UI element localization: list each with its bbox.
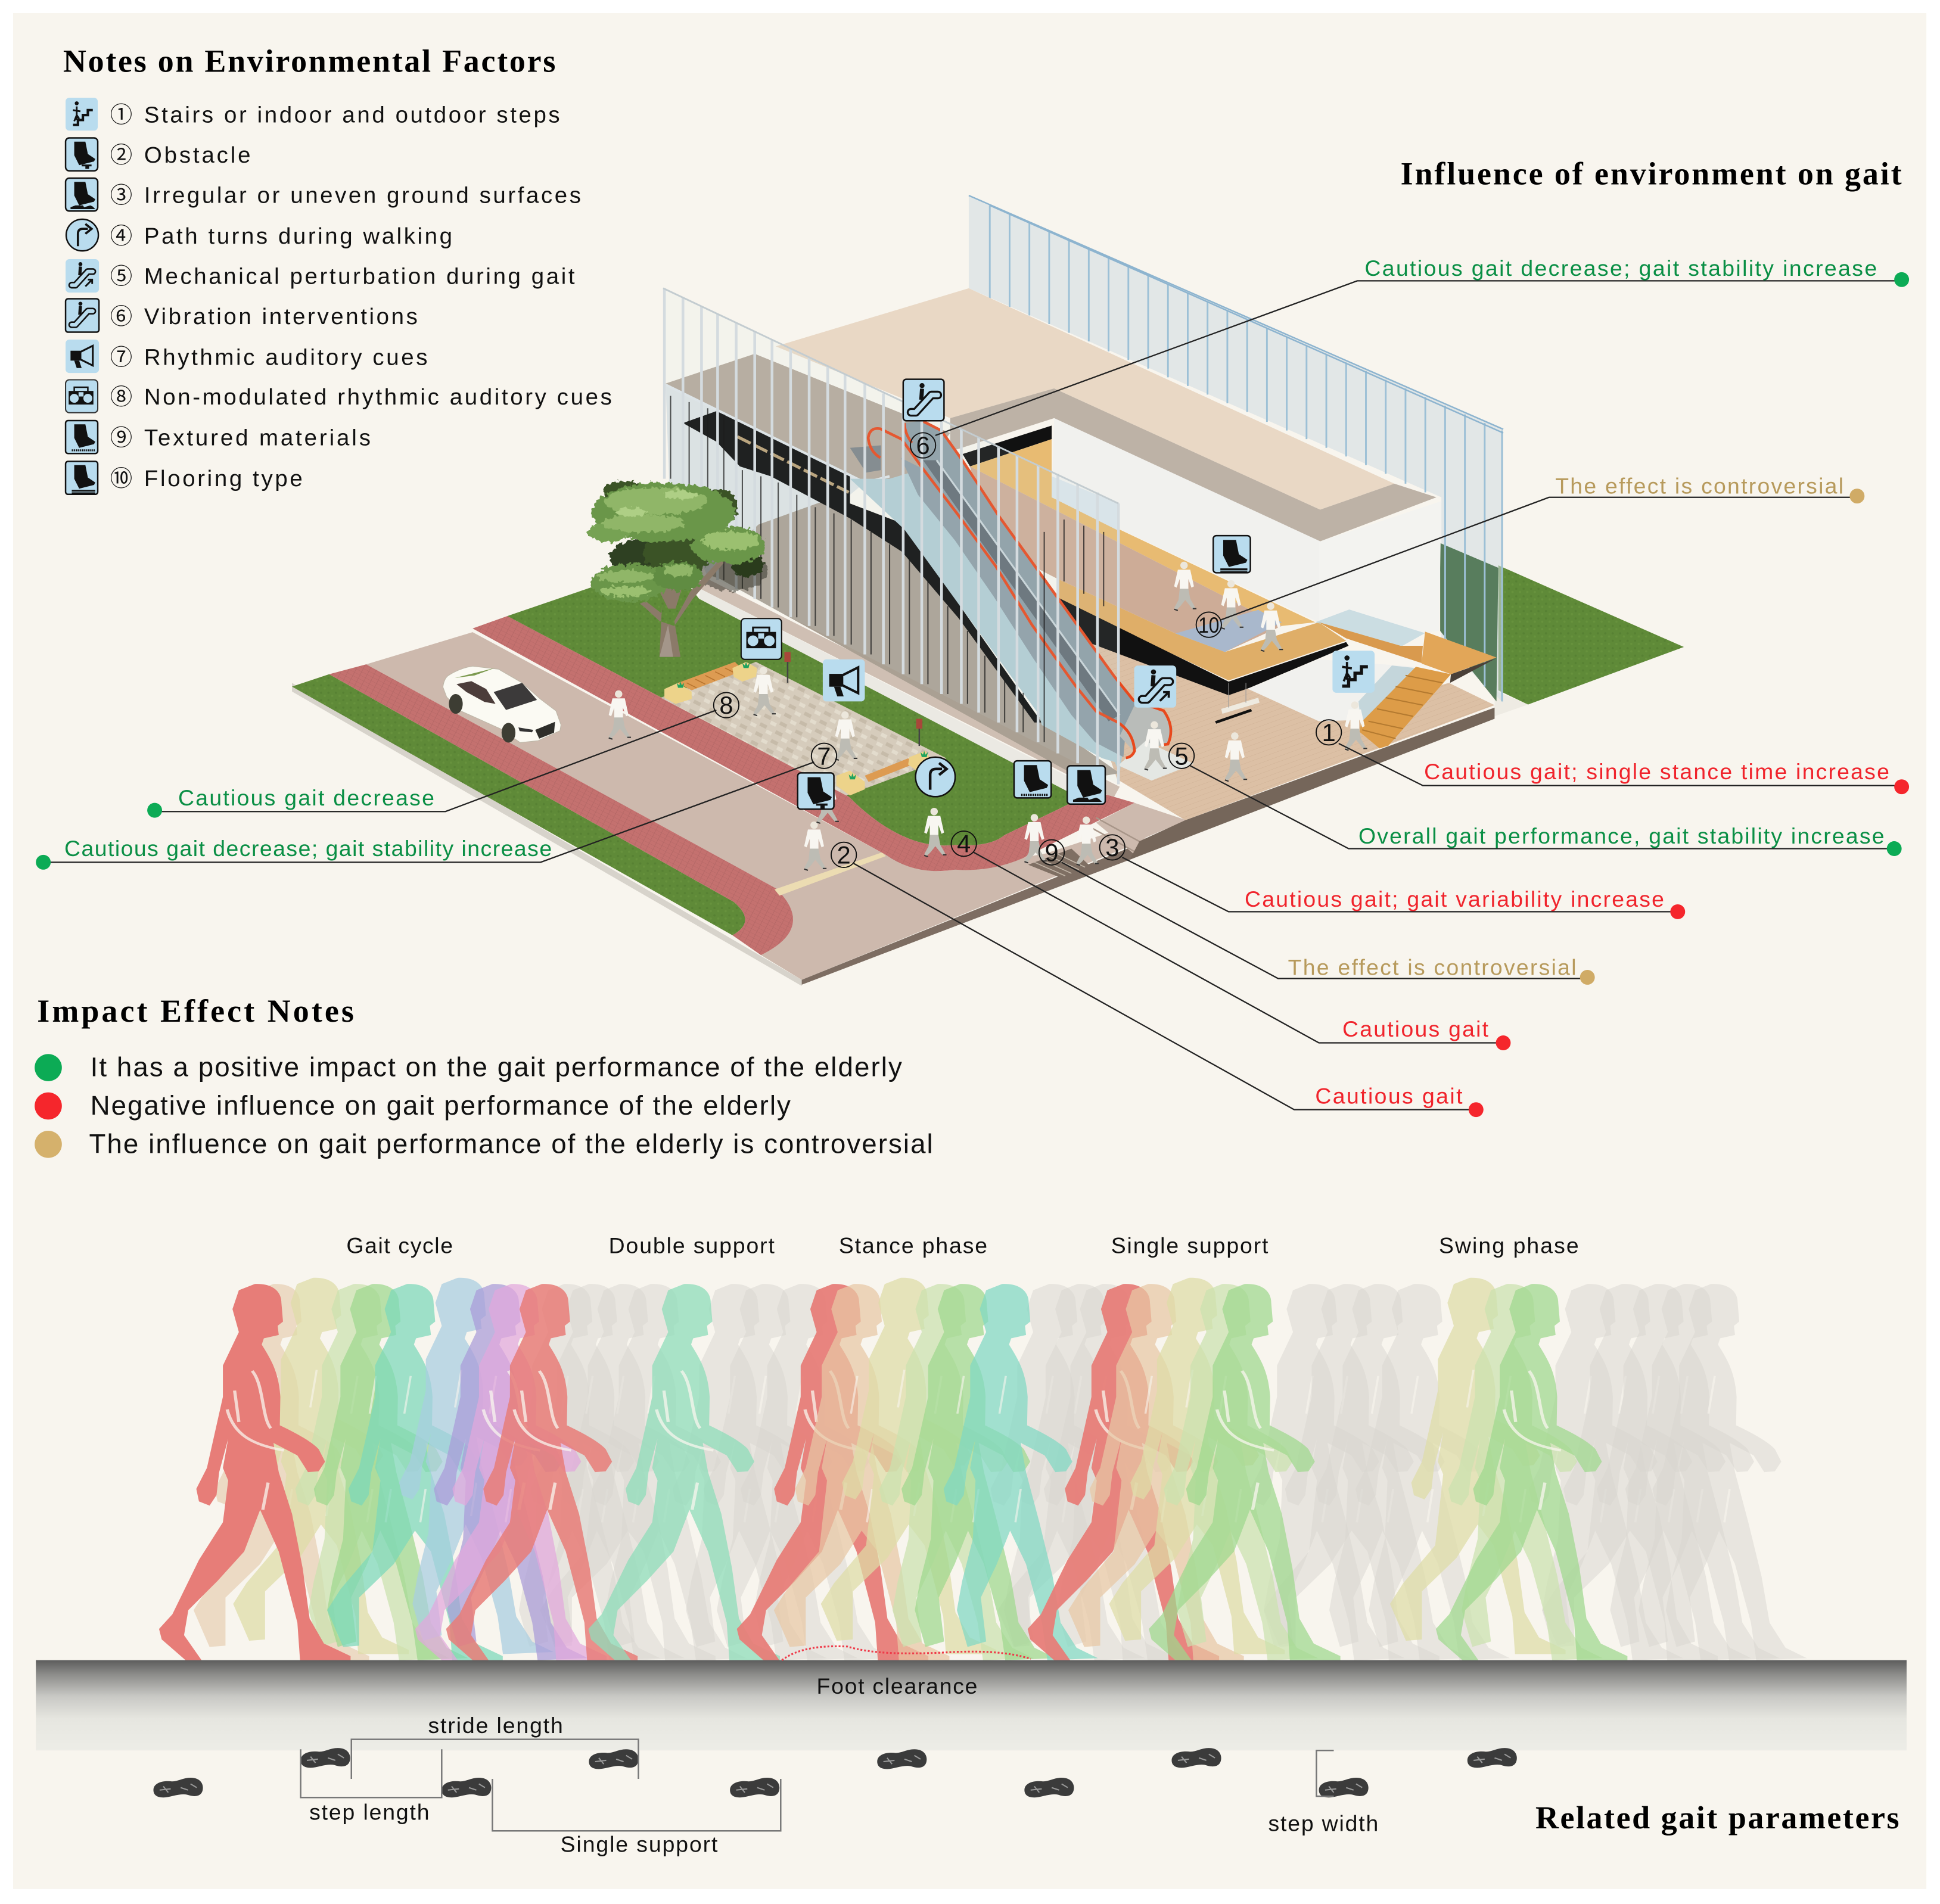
legend row 7: ⑦ (110, 340, 132, 372)
legend row 2: ② (110, 137, 132, 169)
marker 4 (951, 830, 977, 858)
black ceiling opening (963, 425, 1052, 466)
foot clearance label: Foot clearance (817, 1673, 977, 1698)
title: influence of environment on gait: Influence of environment on gait (1401, 155, 1902, 191)
glass pane near mezzanine (1052, 476, 1118, 531)
escalator step edge (937, 460, 1120, 715)
walking silhouettes sequence (159, 1278, 1807, 1660)
legend row 9 (66, 420, 371, 453)
escalator landing platform (1118, 741, 1194, 780)
footprints (153, 1748, 1517, 1797)
scene icon: vibration escalator (903, 379, 944, 421)
floor rail (666, 385, 890, 483)
bracket stride length (352, 1740, 638, 1779)
tree shadow (698, 552, 767, 592)
car wheels (449, 694, 515, 743)
ground floor deck (1064, 625, 1494, 820)
legend row 1: ① (110, 97, 132, 129)
back facade fins (990, 206, 1502, 701)
lamp posts (788, 658, 919, 746)
scene icon: mechanical perturbation (1134, 665, 1176, 708)
scene icon: obstacle (798, 773, 834, 809)
legend row 3: ③ (110, 178, 132, 210)
legend row 4 (66, 218, 452, 251)
marker 9 (1039, 838, 1064, 866)
impact legend (35, 1052, 933, 1159)
callout 1: stairs effect (1339, 743, 1909, 794)
callout 1: stairs effect: Cautious gait; single stance time increase (1424, 759, 1889, 784)
escalator body (901, 421, 1173, 752)
stance phase figures (737, 1278, 1098, 1660)
escalator steps (923, 460, 1120, 721)
gait phase labels (346, 1233, 1579, 1258)
title: notes on environmental factors: Notes on Environmental Factors (63, 43, 555, 79)
marker 3: 3 (1105, 833, 1119, 861)
road marking (775, 853, 886, 895)
rear window reflection (455, 668, 495, 678)
outer green strip (292, 674, 745, 935)
white pavement sliver (1494, 690, 1528, 716)
bracket step length (301, 1749, 442, 1797)
label single support: Single support (1111, 1233, 1269, 1258)
double support figure (588, 1284, 780, 1660)
bracket step width (1316, 1750, 1333, 1796)
scene icon: textured material (1014, 761, 1051, 798)
isometric building scene (292, 195, 1684, 986)
front facade glass (663, 288, 1118, 785)
legend row 1 (66, 97, 560, 130)
legend row 2: Obstacle (144, 142, 250, 168)
marker 6: 6 (916, 431, 930, 459)
front facade fin shadows (670, 396, 1103, 742)
first step cycle figures (194, 1278, 607, 1660)
blue carpet (1176, 610, 1282, 652)
single support figures (1028, 1278, 1341, 1660)
title: impact effect notes: Impact Effect Notes (37, 993, 354, 1029)
road surface (366, 632, 1151, 980)
red figure start of cycle (159, 1284, 350, 1660)
legend row 3: Irregular or uneven ground surfaces (144, 183, 581, 209)
legend row 5 (66, 259, 575, 293)
marker 8: 8 (719, 691, 733, 719)
legend row 4: ④ (110, 218, 132, 250)
marker 1 (1316, 718, 1341, 746)
legend row 6: ⑥ (110, 298, 132, 331)
lamp heads (785, 652, 922, 729)
callout 8: non-modulated cues effect: Cautious gait decrease (178, 785, 434, 810)
marker 2: 2 (837, 841, 851, 869)
ground gradient band (36, 1660, 1907, 1750)
callout 5: perturbation effect: Overall gait performance, gait stability increase (1358, 823, 1885, 848)
black floor band and diagonal (683, 410, 1041, 723)
scene icon: boombox (741, 618, 782, 659)
mezzanine floor (970, 466, 1282, 652)
back glass curtain wall (969, 195, 1503, 702)
white car (443, 666, 561, 743)
back facade top rail (969, 195, 1503, 433)
escalator landing box (850, 446, 881, 472)
car windshield (494, 683, 537, 710)
callout 5: perturbation effect (1190, 766, 1902, 856)
textured paving patch (1028, 849, 1089, 877)
entry steps (1089, 818, 1146, 854)
mezzanine deck (1058, 579, 1346, 680)
slab side edge (292, 683, 802, 986)
car body (443, 666, 561, 743)
back stair flight (1319, 623, 1423, 663)
car headlight (518, 727, 533, 732)
roof slab (776, 288, 1394, 510)
callouts with leader lines (36, 256, 1909, 1117)
red figure end of cycle (446, 1284, 638, 1660)
marker 2 (831, 841, 856, 869)
gait parameter labels (309, 1713, 1378, 1857)
callout 10: flooring effect (1221, 474, 1864, 620)
gait parameter brackets (301, 1740, 1333, 1831)
marker 9: 9 (1045, 838, 1059, 866)
callout 3: uneven ground effect: Cautious gait; gait variability increase (1245, 886, 1664, 911)
label step width: step width (1268, 1810, 1378, 1835)
scene icon: megaphone (823, 659, 865, 701)
marker 5 (1169, 742, 1194, 770)
title: related gait parameters: Related gait parameters (1535, 1800, 1899, 1835)
white wall under deck (1248, 659, 1416, 721)
legend controversial: The influence on gait performance of the elderly is controversial (89, 1128, 933, 1159)
legend row 10: Flooring type (144, 466, 303, 491)
main stair flight (1360, 667, 1451, 748)
legend: environmental factors (66, 97, 612, 494)
legend row 6: Vibration interventions (144, 304, 418, 329)
label swing phase: Swing phase (1439, 1233, 1579, 1258)
escalator handrail left (868, 428, 1134, 758)
stair glass panel (1358, 665, 1416, 723)
legend negative: Negative influence on gait performance of the elderly (91, 1090, 791, 1121)
hanging swing bench (1215, 683, 1260, 724)
legend row 5: Mechanical perturbation during gait (144, 264, 575, 290)
textured stripes (1034, 854, 1085, 876)
walking elderly people (609, 562, 1367, 870)
pale glass zone below floor rail (666, 385, 865, 579)
bracket single support (492, 1779, 781, 1831)
white strip along facade (699, 589, 1120, 809)
marker 7: 7 (817, 742, 831, 770)
legend row 9: ⑨ (110, 420, 132, 452)
callout 6: vibration effect (935, 256, 1909, 435)
landing shadow (1450, 658, 1497, 683)
callout 3: uneven ground effect (1122, 857, 1685, 919)
marker 7 (812, 742, 837, 770)
planter plants (677, 662, 928, 779)
label gait cycle: Gait cycle (346, 1233, 453, 1258)
legend row 10 (66, 461, 303, 494)
legend row 9: Textured materials (144, 425, 371, 451)
legend row 7: Rhythmic auditory cues (144, 345, 427, 371)
inner brick strip (472, 616, 1134, 871)
front facade top rail (663, 288, 1118, 503)
callout 9: textured material effect (1062, 862, 1595, 985)
legend row 10: ⑩ (110, 461, 132, 493)
dark green reflection (1440, 543, 1498, 701)
wood strip on mezzanine (970, 439, 1315, 626)
legend row 8: Non-modulated rhythmic auditory cues (144, 384, 612, 410)
pink strip along facade (700, 579, 1120, 798)
swing phase figures (1390, 1278, 1627, 1660)
marker 10: 10 (1198, 612, 1219, 637)
car side window (456, 681, 496, 704)
glass stair rail (1315, 609, 1425, 647)
scene icon: path turn (916, 757, 955, 797)
marker 5: 5 (1175, 742, 1189, 770)
upper wall inside facade (666, 354, 950, 489)
callout 4: path turn effect (974, 853, 1510, 1050)
parapet band (950, 388, 1437, 542)
entry platform (1096, 803, 1186, 854)
wood ledge in black band (738, 437, 848, 492)
outer brick strip (329, 664, 793, 955)
escalator glass side (850, 469, 1126, 773)
car grille (535, 722, 555, 739)
label stride length: stride length (428, 1713, 563, 1738)
upper bench seat (678, 662, 744, 690)
paved plaza (661, 662, 947, 795)
callout 2: obstacle effect: Cautious gait (1315, 1083, 1463, 1108)
marker 6 (910, 431, 935, 459)
slab dark front edge (802, 844, 1139, 985)
callout 4: path turn effect: Cautious gait (1342, 1016, 1489, 1041)
white end wall (1319, 501, 1441, 633)
callout 8: non-modulated cues effect (147, 710, 716, 818)
black underside of deck (1058, 598, 1348, 695)
legend row 5: ⑤ (110, 259, 132, 291)
marker 4: 4 (957, 830, 971, 858)
label step length: step length (309, 1800, 430, 1825)
legend row 2 (66, 137, 250, 171)
legend row 6 (66, 298, 418, 332)
callout 6: vibration effect: Cautious gait decrease; gait stability increase (1364, 256, 1877, 281)
escalator lower panel (901, 458, 1126, 757)
scene icon: stairs (1332, 651, 1375, 693)
lower bench seat (865, 758, 916, 782)
marker 1: 1 (1322, 718, 1336, 746)
foot clearance curve (782, 1646, 1031, 1660)
label single support: Single support (561, 1832, 718, 1857)
legend row 3 (66, 178, 581, 211)
escalator handrail right (904, 421, 1171, 745)
central lawn (507, 559, 1089, 845)
callout 10: flooring effect: The effect is controversial (1555, 474, 1843, 499)
numbered markers on scene (714, 431, 1341, 869)
upper bench slats (686, 668, 735, 688)
callout 9: textured material effect: The effect is controversial (1288, 954, 1576, 979)
benches and planters (664, 652, 931, 795)
stair landing (1422, 631, 1497, 674)
legend row 4: Path turns during walking (144, 223, 452, 249)
upper planters (664, 662, 757, 704)
marker 3 (1100, 833, 1125, 861)
right lawn (1498, 565, 1684, 705)
stair tread lines (1362, 676, 1442, 739)
front floor edge (1130, 708, 1494, 860)
front facade fins (664, 288, 1118, 785)
callout 7: rhythmic cues effect: Cautious gait decrease; gait stability increase (64, 836, 552, 861)
white upper wall (1052, 418, 1322, 624)
tree trunk and branches (640, 542, 724, 657)
lower planters (837, 751, 931, 795)
legend row 1: Stairs or indoor and outdoor steps (144, 102, 560, 128)
scene icon: uneven ground (1067, 766, 1105, 804)
scene icon: flooring (1213, 536, 1251, 573)
label stance phase: Stance phase (839, 1233, 987, 1258)
callout 2: obstacle effect (854, 863, 1484, 1117)
tree (587, 481, 767, 657)
lower wall behind fins (707, 502, 1120, 779)
tree foliage (587, 481, 766, 601)
callout 7: rhythmic cues effect (36, 762, 814, 870)
legend positive: It has a positive impact on the gait performance of the elderly (91, 1052, 902, 1082)
legend row 7 (66, 340, 427, 373)
gray background figures (506, 1284, 1807, 1660)
label double support: Double support (609, 1233, 775, 1258)
legend row 8: ⑧ (110, 379, 132, 411)
marker 8 (714, 691, 739, 719)
escalator bottom curve (1120, 705, 1173, 752)
legend row 8 (66, 379, 612, 413)
